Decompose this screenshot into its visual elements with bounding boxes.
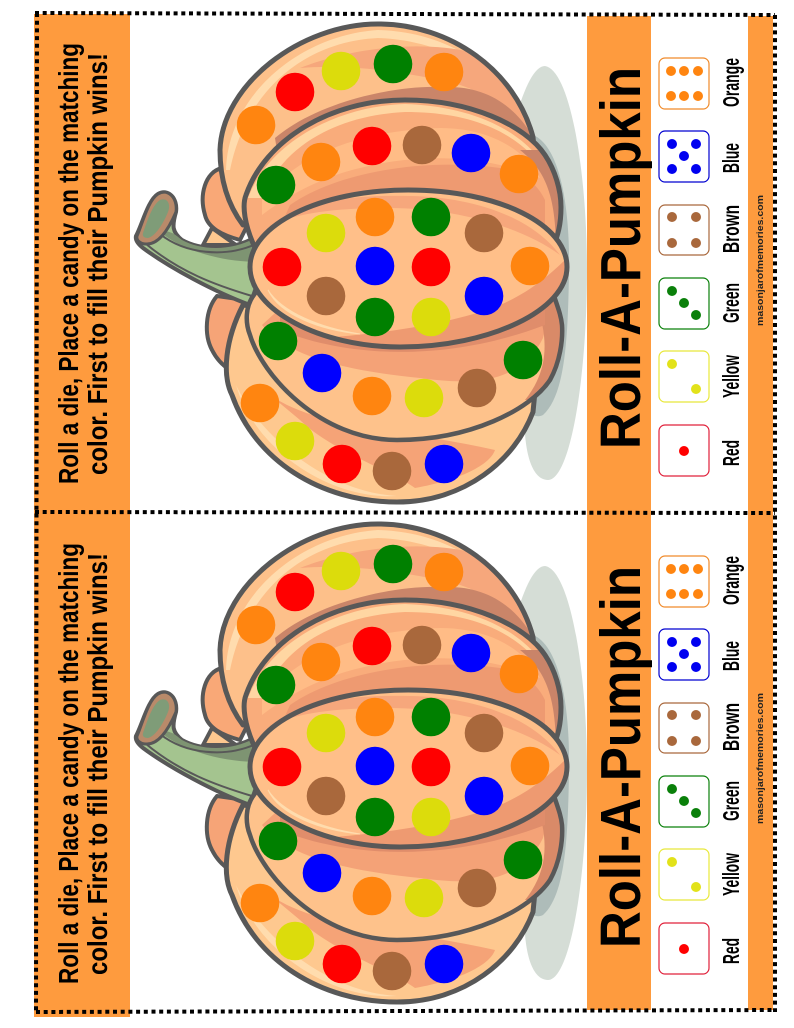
title: Roll-A-Pumpkin — [589, 67, 653, 449]
dice colour labels: Green — [718, 781, 744, 821]
instructions text — [53, 543, 113, 984]
die: red one — [659, 425, 709, 476]
dice colour labels: Blue — [718, 143, 744, 173]
dice colour labels — [718, 556, 744, 964]
dice colour labels: Brown — [718, 703, 744, 751]
dice colour labels: Red — [718, 938, 744, 964]
dice colour labels: Yellow — [718, 355, 744, 398]
die: orange six — [659, 58, 709, 109]
die: blue five — [659, 629, 709, 680]
die: brown four — [659, 703, 709, 753]
instructions text: color. First to fill their Pumpkin wins! — [82, 553, 113, 975]
instructions text — [53, 43, 113, 484]
die: red one — [659, 923, 709, 974]
dice colour labels: Brown — [718, 205, 744, 253]
panel: orange instruction strip — [34, 14, 130, 1017]
die: brown four — [659, 205, 709, 255]
website credit: masonjarofmemories.com — [755, 693, 766, 824]
candy colour spaces — [237, 45, 549, 490]
panel: orange title strip — [587, 16, 651, 1010]
pumpkin illustration — [136, 524, 587, 1002]
candy colour spaces — [237, 545, 549, 990]
die: yellow two — [659, 849, 709, 900]
dice colour labels: Orange — [718, 58, 744, 107]
die: green three — [659, 776, 709, 827]
dice colour labels — [718, 58, 744, 466]
dice colour labels: Blue — [718, 641, 744, 671]
game card: bottom — [53, 524, 766, 1002]
dice colour labels: Yellow — [718, 853, 744, 896]
title: Roll-A-Pumpkin — [589, 566, 653, 948]
die: green three — [659, 278, 709, 329]
website credit: masonjarofmemories.com — [755, 195, 766, 326]
pumpkin illustration — [136, 24, 587, 502]
die: orange six — [659, 556, 709, 607]
instructions text: Roll a die, Place a candy on the matching — [53, 543, 84, 984]
dice colour labels: Orange — [718, 556, 744, 605]
panel: orange website strip — [748, 16, 773, 1010]
dice colour labels: Green — [718, 283, 744, 323]
dice colour labels: Red — [718, 440, 744, 466]
die: yellow two — [659, 351, 709, 402]
game card: top — [53, 24, 766, 502]
die: blue five — [659, 131, 709, 182]
